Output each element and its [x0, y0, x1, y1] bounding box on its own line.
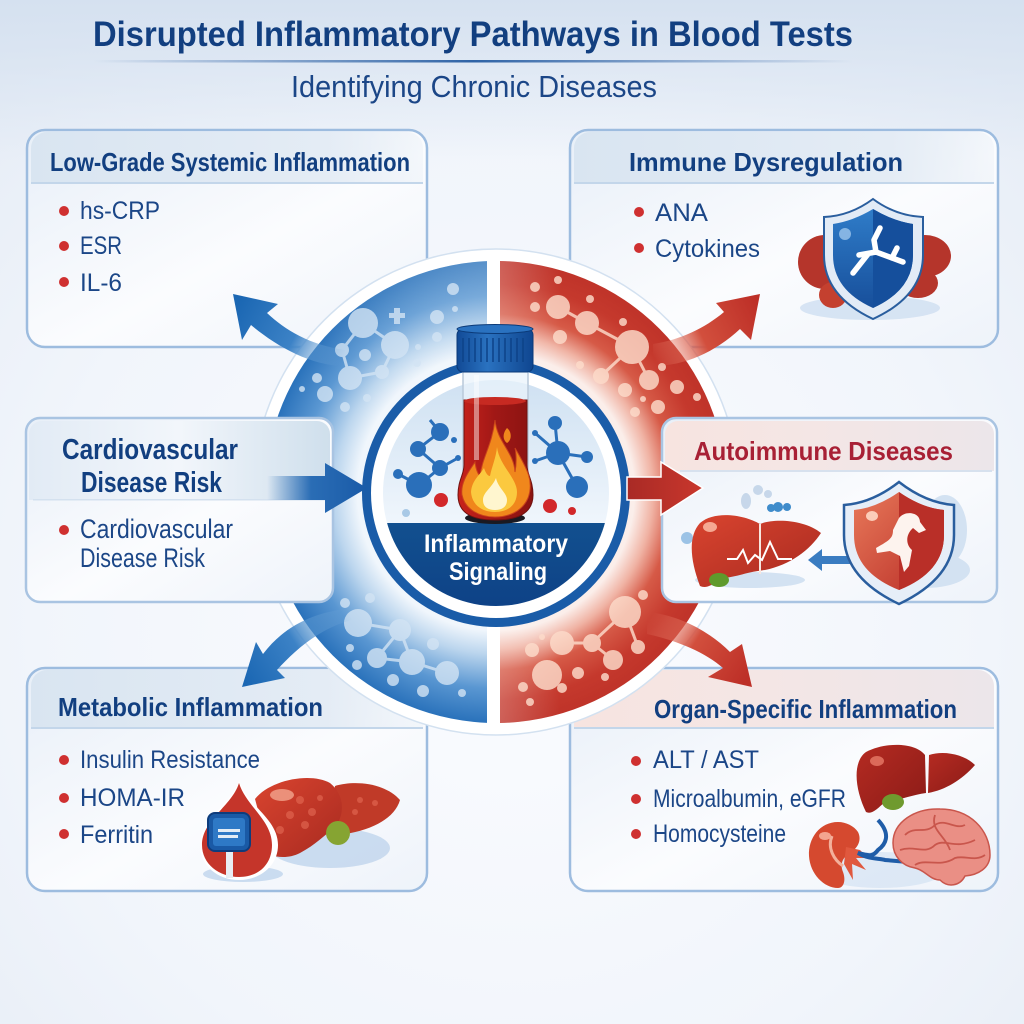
- heading: Low-Grade Systemic Inflammation: [50, 147, 410, 177]
- center badge: [362, 324, 630, 627]
- list: ANA: [655, 199, 708, 227]
- panel: organ-specific inflammation: [570, 668, 998, 891]
- molecule: right: [532, 416, 593, 515]
- arrow: to metabolic inflammation: [242, 608, 352, 687]
- list: ALT / AST: [653, 746, 759, 774]
- subtitle: Identifying Chronic Diseases: [291, 69, 657, 104]
- label line 2: Signaling: [449, 558, 547, 586]
- list: IL-6: [80, 269, 122, 297]
- list: [59, 514, 233, 573]
- label: Inflammatory: [424, 530, 568, 558]
- banner: [387, 523, 605, 606]
- list: Disease Risk: [80, 543, 205, 573]
- molecules: lower red: [518, 590, 648, 706]
- list: Homocysteine: [653, 820, 786, 848]
- icon: fatty liver with blood drop and glucose meter: [200, 778, 400, 882]
- heading: Organ-Specific Inflammation: [654, 694, 957, 724]
- icon: immune shield with organs: [798, 199, 951, 320]
- icon: liver with ECG: [681, 485, 821, 588]
- list: hs-CRP: [80, 197, 160, 225]
- panel: metabolic inflammation: [27, 668, 427, 891]
- heading: Autoimmune Diseases: [694, 436, 953, 466]
- test tube with flame: [457, 324, 533, 524]
- molecules: lower blue: [340, 593, 466, 697]
- heading: Cardiovascular: [62, 434, 238, 466]
- icon: brain: [893, 809, 990, 885]
- icon: autoimmune shield: [844, 482, 970, 604]
- molecule: left: [393, 420, 461, 517]
- arrow: to low-grade systemic inflammation: [233, 294, 345, 366]
- list: Ferritin: [80, 821, 153, 849]
- molecules: upper blue: [299, 283, 459, 412]
- list: Microalbumin, eGFR: [653, 785, 846, 813]
- big circular pathway disc: [253, 249, 739, 735]
- panel: immune dysregulation: [570, 130, 998, 347]
- list: HOMA-IR: [80, 784, 185, 812]
- list: Cardiovascular: [80, 514, 233, 544]
- panel: low-grade systemic inflammation: [27, 130, 427, 347]
- list: [631, 746, 846, 848]
- heading: Metabolic Inflammation: [58, 692, 323, 722]
- list: ESR: [80, 232, 122, 260]
- icon: small arrow: [808, 549, 852, 571]
- list: [59, 746, 260, 849]
- heading: Immune Dysregulation: [629, 147, 903, 177]
- panel: autoimmune diseases: [662, 418, 997, 604]
- list: Cytokines: [655, 235, 760, 263]
- arrow: to autoimmune: [627, 462, 703, 515]
- icon: liver: [857, 745, 975, 813]
- list: [59, 197, 160, 297]
- title: Disrupted Inflammatory Pathways in Blood Tests: [93, 15, 853, 54]
- icon: kidney: [809, 822, 945, 888]
- arrow: from cardiovascular: [267, 463, 367, 513]
- icon: connector: [858, 820, 920, 863]
- blue half: [278, 261, 487, 723]
- list: [634, 199, 760, 263]
- heading line 2: Disease Risk: [81, 467, 223, 499]
- panel: cardiovascular disease risk: [26, 418, 333, 602]
- molecules: upper red: [530, 276, 701, 417]
- list: Insulin Resistance: [80, 746, 260, 774]
- arrow: to immune dysregulation: [653, 294, 760, 366]
- red half: [500, 261, 714, 723]
- cap: [457, 324, 533, 372]
- arrow: to organ-specific inflammation: [647, 612, 752, 687]
